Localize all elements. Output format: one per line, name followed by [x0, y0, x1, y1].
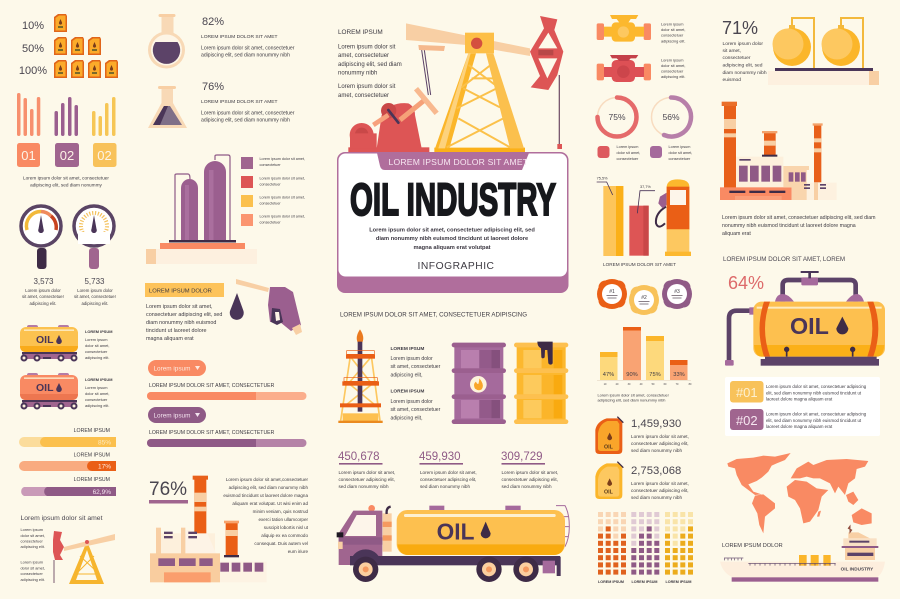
progress bars: three percent bars: 62,9%	[93, 489, 111, 496]
bar chart: four percent bars: Lorem ipsum dolor sit amet, consectetuer	[598, 392, 670, 398]
stat: 459,930	[419, 451, 477, 489]
note 01: elit, sed diam nonummy nibh euismod tincidunt ut	[766, 390, 862, 396]
stat: 2,753,068: consectetuer adipiscing elit,	[631, 488, 689, 493]
stat: 1,459,930: Lorem ipsum dolor sit amet,	[631, 434, 689, 439]
legend: refinery: consectetuer	[260, 202, 281, 206]
text block: 82 percent: Lorem ipsum dolor sit amet, consectetuer	[201, 46, 295, 52]
text block: 76 percent	[201, 81, 295, 124]
stat: 2,753,068: sed diam nonummy nibh	[631, 495, 682, 500]
legend: donuts: dolor sit amet,	[668, 151, 692, 155]
text block: 82 percent: 82%	[202, 16, 224, 28]
icon: orange oil rail tanker: consectetuer	[85, 397, 108, 402]
title paragraph	[369, 228, 535, 251]
text block: 71 percent	[722, 18, 767, 83]
note 02: Lorem ipsum dolor sit amet, consectetuer adipiscing	[766, 412, 867, 416]
icon: spherical storage tanks	[768, 18, 879, 85]
text block: 76 percent and paragraph: 76%	[149, 479, 187, 500]
progress bars: three percent bars	[19, 428, 116, 496]
icon: orange oil rail tanker: adipiscing elit.	[85, 403, 109, 408]
note 02: elit, sed diam nonummy nibh euismod tincidunt ut	[766, 418, 862, 423]
legend: donuts	[598, 145, 692, 161]
text block: 71 percent: sit amet,	[722, 48, 741, 54]
text block: red valve: consectetuer	[661, 68, 684, 74]
chart: waffle grid purple: LOREM IPSUM	[631, 580, 658, 584]
chart: waffle grid purple	[631, 512, 659, 584]
text block: yellow valve: adipiscing elit.	[661, 38, 685, 44]
stat: 309,729: consectetuer adipiscing elit,	[502, 477, 558, 482]
text block: 76 percent and paragraph: aliquam erat volutpat. Ut wisi enim ad	[232, 501, 308, 506]
legend: refinery: consectetuer	[260, 182, 281, 186]
banner	[377, 153, 529, 170]
text block: 76 percent: 76%	[202, 81, 224, 93]
stat: 2,753,068	[631, 465, 689, 500]
icon: yellow oil rail tanker	[20, 325, 112, 362]
bar chart: three small bar groups: 02	[60, 148, 74, 163]
note 02: #02	[736, 413, 758, 428]
icon: drilling rig	[338, 329, 383, 423]
bar chart: four percent bars: adipiscing elit, sed diam nonummy nibh	[598, 398, 665, 402]
donut chart: 75 percent	[598, 98, 636, 136]
panel: small pump jack with text: dolor sit amet,	[20, 533, 45, 538]
text block: red valve: Lorem ipsum	[661, 58, 684, 62]
text block: rig captions: sit amet, consectetuer	[390, 364, 441, 370]
text block: 76 percent and paragraph: consequat. Duis autem vel	[254, 541, 308, 546]
icon: yellow barrel with oil spill	[514, 342, 568, 424]
icon: yellow oil rail tanker: dolor sit amet,	[85, 343, 109, 348]
icon: gauges with values: 3,573	[33, 277, 54, 286]
stat: 459,930: Lorem ipsum dolor sit amet,	[420, 470, 477, 475]
progress bars: three percent bars: LOREM IPSUM	[74, 477, 110, 483]
panel: small pump jack with text: adipiscing elit.	[20, 544, 45, 549]
progress bars: three percent bars: 85%	[98, 440, 111, 446]
bar chart: yellow and red with fuel pump	[597, 176, 691, 256]
subtitle: INFOGRAPHIC	[417, 261, 495, 272]
icon: oil tanker ship	[720, 526, 885, 582]
text block: yellow valve: dolor sit amet,	[661, 27, 685, 32]
stat: 450,678: Lorem ipsum dolor sit amet,	[338, 470, 395, 475]
bar chart: four percent bars: 20	[616, 383, 619, 386]
legend: refinery: Lorem ipsum dolor sit amet,	[260, 176, 305, 180]
icon: orange oil rail tanker: OIL	[36, 382, 54, 394]
caption: bar chart: LOREM IPSUM DOLOR SIT AMET	[603, 262, 676, 268]
text block: center intro: nonummy nibh	[338, 70, 377, 76]
text block: yellow valve: consectetuer	[661, 32, 684, 38]
chart: waffle grid orange	[598, 512, 626, 584]
panel: small pump jack with text: Lorem ipsum dolor sit amet	[20, 515, 103, 522]
stat: 2,753,068: Lorem ipsum dolor sit amet,	[631, 481, 689, 486]
legend: refinery: Lorem ipsum dolor sit amet,	[260, 214, 305, 218]
panel: fuel can percent rows: 50%	[22, 43, 44, 55]
text block: 76 percent and paragraph: Lorem ipsum dolor sit amet,consectetuer	[226, 477, 308, 482]
icon: gauges with values	[21, 206, 117, 306]
legend: donuts: Lorem ipsum	[668, 145, 690, 149]
icon: ranked badges	[597, 279, 692, 315]
icon: tanker truck: OIL	[437, 518, 475, 544]
title: OIL INDUSTRY	[350, 174, 556, 225]
stat: 450,678	[338, 451, 395, 489]
panel: orange progress with pill	[147, 360, 306, 400]
legend: refinery: consectetuer	[260, 220, 281, 224]
panel: purple progress with pill: Lorem ipsum	[154, 412, 190, 420]
progress bars: three percent bars: 17%	[98, 464, 111, 470]
icon: yellow oil rail tanker: adipiscing elit.	[85, 355, 109, 360]
text block: rig captions: LOREM IPSUM	[390, 346, 424, 352]
icon: gauges with values: 5,733	[84, 277, 105, 286]
text block: red valve: dolor sit amet,	[661, 63, 685, 68]
panel: small pump jack with text: consectetuer	[20, 538, 43, 544]
text block: rig captions: LOREM IPSUM	[390, 388, 424, 394]
text block: factory description	[722, 215, 876, 237]
text block: center intro: Lorem ipsum dolor sit	[338, 44, 396, 50]
text block: lorem ipsum dolor with yellow label: diam nonummy nibh euismod	[146, 320, 216, 326]
icon: horizontal oil tank with pipes	[725, 271, 885, 366]
panel: small pump jack with text: Lorem ipsum	[20, 560, 43, 564]
bar chart: three small bar groups: 01	[21, 148, 36, 163]
icon: horizontal oil tank with pipes: OIL	[790, 313, 829, 339]
icon: orange oil rail tanker: LOREM IPSUM	[85, 377, 112, 382]
note 01: laoreet dolore magna aliquam erat	[766, 396, 833, 402]
icon: yellow oil rail tanker: consectetuer	[85, 349, 108, 354]
bar chart: four percent bars: 10	[604, 383, 607, 386]
text block: lorem ipsum dolor with yellow label: Lorem ipsum dolor sit amet,	[146, 304, 213, 310]
bar chart: four percent bars: 47%	[603, 372, 614, 378]
text block: 76 percent and paragraph: aliquip ex ea commodo	[261, 533, 308, 538]
title paragraph: diam nonummy nibh euismod tincidunt ut laoreet dolore	[376, 236, 528, 242]
text block: center intro	[338, 29, 402, 99]
text block: 76 percent: adipiscing elit, sed diam nonummy nibh	[201, 118, 290, 124]
stat: 459,930: sed diam nonummy nibh	[420, 484, 470, 489]
note 01	[730, 381, 867, 402]
panel: title card	[337, 152, 568, 293]
text block: factory description: nonummy nibh euismod tincidunt ut laoreet dolore magna	[722, 223, 856, 229]
text block: 76 percent and paragraph: suscipit lobortis nisl ut	[264, 525, 309, 530]
text block: lorem ipsum dolor with yellow label: tincidunt ut laoreet dolore	[146, 328, 207, 334]
text block: 76 percent and paragraph: euismod tincidunt ut laoreet dolore magna	[223, 493, 308, 498]
bar chart: four percent bars: 33%	[673, 372, 685, 378]
text block: lorem ipsum dolor with yellow label	[145, 283, 224, 342]
panel: fuel can percent rows	[19, 14, 118, 78]
text block: yellow valve: Lorem ipsum	[661, 22, 684, 26]
icon: world map	[727, 453, 872, 533]
note 01: Lorem ipsum dolor sit amet, consectetuer adipiscing	[766, 384, 867, 389]
legend: refinery: Lorem ipsum dolor sit amet,	[260, 196, 305, 200]
panel: small pump jack with text	[20, 515, 115, 584]
icon: gauges with values: adipiscing elit.	[30, 301, 56, 306]
icon: round flask	[148, 14, 185, 68]
text block: lorem ipsum dolor with yellow label: magna aliquam erat	[146, 336, 194, 342]
stat: 309,729	[501, 451, 558, 489]
icon: ranked badges: #3	[674, 289, 680, 295]
icon: fuel nozzle and drop	[230, 279, 302, 335]
text block: 82 percent	[201, 16, 295, 58]
icon: factory top right	[720, 102, 837, 200]
text block: center intro: amet, consectetuer	[338, 93, 389, 99]
icon: large pump jack	[348, 16, 563, 152]
text block: rig captions: sit amet, consectetuer	[390, 407, 441, 413]
progress bars: three percent bars: LOREM IPSUM	[74, 428, 110, 434]
legend: refinery	[241, 157, 305, 226]
icon: oil tanker ship: OIL INDUSTRY	[841, 566, 874, 571]
panel: orange progress with pill: LOREM IPSUM DOLOR SIT AMET, CONSECTETUER	[149, 383, 275, 389]
panel: small pump jack with text: Lorem ipsum	[20, 527, 43, 532]
text block: 76 percent: LOREM IPSUM DOLOR SIT AMET	[201, 99, 278, 105]
progress bars: three percent bars: LOREM IPSUM	[74, 452, 110, 458]
text block: 76 percent and paragraph	[149, 477, 309, 554]
text block: 71 percent: adipiscing elit, sed	[722, 62, 763, 68]
legend: donuts: dolor sit amet,	[616, 151, 640, 155]
legend: donuts: Lorem ipsum	[616, 145, 638, 149]
icon: refinery towers	[146, 155, 257, 264]
stat: 1,459,930	[631, 418, 689, 453]
icon: orange oil rail tanker	[20, 373, 112, 410]
text block: red valve: adipiscing elit.	[661, 74, 685, 79]
text block: yellow valve	[661, 22, 685, 44]
stat: 459,930: consectetuer adipiscing elit,	[420, 477, 476, 482]
chart: waffle grid yellow	[665, 512, 693, 584]
text block: center intro: Lorem ipsum dolor sit	[338, 84, 396, 90]
bar chart: four percent bars: 30	[628, 383, 631, 386]
panel: orange progress with pill: Lorem ipsum	[154, 366, 190, 372]
text block: factory description: aliquam erat	[722, 231, 751, 237]
text block: rig captions	[390, 346, 441, 422]
text block: 71 percent: Lorem ipsum dolor	[722, 41, 763, 47]
icon: red valve	[597, 55, 651, 82]
heading: tank section: LOREM IPSUM DOLOR SIT AMET, LOREM	[723, 256, 845, 263]
title paragraph: magna aliquam erat volutpat	[413, 245, 491, 251]
bar chart: three small bar groups: adipiscing elit, sed diam nonummy	[30, 182, 102, 188]
legend: refinery: Lorem ipsum dolor sit amet,	[260, 157, 305, 161]
icon: factory bottom left	[150, 476, 267, 582]
icon: gauges with values: sit amet, consectetuer	[74, 294, 117, 299]
stat: 1,459,930: consectetuer adipiscing elit,	[631, 441, 689, 446]
stat: 309,729: sed diam nonummy nibh	[502, 484, 552, 489]
bar chart: three small bar groups: 02	[97, 148, 112, 163]
text block: 71 percent: diam nonummy nibh	[722, 70, 767, 76]
bar chart: yellow and red with fuel pump: 37,7%	[640, 185, 651, 189]
text block: 71 percent: 71%	[722, 18, 758, 38]
text block: factory description: Lorem ipsum dolor sit amet, consectetuer adipiscing elit, sed diam	[722, 215, 876, 221]
text block: 71 percent: euismod	[722, 77, 741, 83]
text block: center intro: LOREM IPSUM	[338, 29, 383, 36]
icon: conical flask	[148, 86, 187, 128]
banner: LOREM IPSUM DOLOR SIT AMET	[388, 157, 529, 167]
note 02: laoreet dolore magna aliquam erat	[766, 424, 833, 429]
panel: numbered notes	[725, 377, 880, 436]
icon: yellow oil rail tanker: LOREM IPSUM	[85, 329, 112, 334]
bar chart: three small bar groups: Lorem ipsum dolor sit amet, consectetuer	[23, 176, 109, 180]
bar chart: four percent bars: 40	[640, 383, 643, 386]
icon: gauges with values: adipiscing elit.	[82, 301, 108, 306]
icon: tanker truck	[337, 505, 569, 582]
text block: center intro: amet, consectetuer	[338, 53, 389, 59]
icon: gauges with values: sit amet, consectetuer	[22, 294, 65, 299]
bar chart: three small bar groups	[17, 93, 116, 188]
text block: lorem ipsum dolor with yellow label: consectetuer adipiscing elit, sed	[146, 312, 222, 318]
stat: 309,729: 309,729	[501, 451, 543, 463]
donut chart: 75 percent: 75%	[608, 112, 626, 122]
text block: 71 percent: consectetuer	[722, 55, 751, 61]
stat: 1,459,930: 1,459,930	[631, 418, 681, 430]
donut chart: 56 percent	[652, 97, 691, 136]
text block: 76 percent and paragraph: adipiscing elit, sed diam nonummy nibh	[229, 485, 308, 490]
title paragraph: Lorem ipsum dolor sit amet, consectetuer adipiscing elit, sed	[369, 228, 535, 234]
panel: small pump jack with text: consectetuer	[20, 571, 43, 576]
stat: 1,459,930: sed diam nonummy nibh	[631, 448, 682, 453]
icon: orange oil can	[595, 417, 623, 454]
note 02	[730, 409, 867, 430]
icon: yellow oil rail tanker: Lorem ipsum	[85, 337, 108, 342]
panel: small pump jack with text: adipiscing elit.	[20, 577, 45, 582]
donut chart: 56 percent: 56%	[662, 112, 680, 122]
legend: donuts: consectetuer	[616, 157, 639, 161]
bar chart: four percent bars: 90%	[626, 372, 638, 378]
icon: gauges with values: Lorem ipsum dolor	[77, 288, 113, 293]
stat: 450,678: 450,678	[338, 451, 380, 463]
icon: gauges with values: Lorem ipsum dolor	[25, 288, 61, 293]
bar chart: yellow and red with fuel pump: 75,5%	[597, 176, 608, 180]
panel: purple progress with pill	[147, 407, 306, 447]
chart: waffle grid orange: LOREM IPSUM	[598, 580, 624, 584]
icon: orange oil can: OIL	[604, 444, 614, 450]
icon: yellow oil can: OIL	[604, 490, 614, 496]
bar chart: four percent bars: 75%	[649, 372, 661, 378]
icon: ranked badges: #1	[609, 289, 615, 295]
stat: 450,678: sed diam nonummy nibh	[338, 484, 389, 489]
stat: 459,930: 459,930	[419, 451, 461, 463]
stat: 2,753,068: 2,753,068	[631, 465, 681, 477]
text block: 76 percent and paragraph: eum iriure	[288, 549, 308, 554]
icon: purple barrel	[452, 343, 506, 424]
note 01: #01	[736, 385, 758, 400]
bar chart: four percent bars	[597, 327, 692, 402]
text block: rig captions: adipiscing elit,	[390, 372, 422, 378]
icon: orange oil rail tanker: dolor sit amet,	[85, 391, 109, 396]
caption: map: LOREM IPSUM DOLOR	[722, 543, 783, 549]
bar chart: four percent bars: 80	[689, 383, 692, 386]
bar chart: four percent bars: 50	[652, 383, 655, 386]
bar chart: four percent bars: 70	[676, 383, 679, 386]
text block: rig captions: adipiscing elit,	[390, 416, 422, 422]
icon: ranked badges: #2	[641, 295, 647, 301]
icon: yellow oil can	[595, 462, 623, 499]
text block: 82 percent: LOREM IPSUM DOLOR SIT AMET	[201, 34, 278, 40]
text block: rig captions: Lorem ipsum dolor	[390, 356, 433, 362]
panel: fuel can percent rows: 100%	[19, 65, 47, 77]
legend: refinery: consectetuer	[260, 163, 281, 167]
text block: 76 percent: Lorem ipsum dolor sit amet, consectetuer	[201, 110, 295, 116]
text block: 76 percent and paragraph: exerci tation ullamcorper	[258, 517, 308, 522]
stat: 64 percent: 64%	[728, 273, 764, 293]
text block: lorem ipsum dolor with yellow label: LOREM IPSUM DOLOR	[149, 288, 212, 294]
legend: donuts: consectetuer	[668, 157, 691, 161]
bar chart: four percent bars: 60	[664, 383, 667, 386]
panel: fuel can percent rows: 10%	[22, 20, 44, 32]
text block: 76 percent and paragraph: minim veniam, quis nostrud	[253, 509, 308, 514]
stat: 450,678: consectetuer adipiscing elit,	[338, 477, 395, 482]
icon: yellow valve	[597, 15, 651, 42]
heading: section: LOREM IPSUM DOLOR SIT AMET, CONSECTETUER ADIPISCING	[340, 312, 527, 318]
stat: 309,729: Lorem ipsum dolor sit amet,	[502, 470, 558, 475]
icon: orange oil rail tanker: Lorem ipsum	[85, 385, 108, 390]
panel: purple progress with pill: LOREM IPSUM DOLOR SIT AMET, CONSECTETUER	[149, 430, 275, 436]
text block: rig captions: Lorem ipsum dolor	[390, 399, 433, 405]
text block: center intro: adipiscing elit, sed diam	[338, 62, 402, 68]
icon: yellow oil rail tanker: OIL	[36, 334, 54, 346]
text block: red valve	[661, 58, 685, 79]
chart: waffle grid yellow: LOREM IPSUM	[665, 580, 692, 584]
panel: small pump jack with text: dolor sit amet,	[20, 566, 45, 570]
text block: 82 percent: adipiscing elit, sed diam nonummy nibh	[201, 52, 290, 58]
